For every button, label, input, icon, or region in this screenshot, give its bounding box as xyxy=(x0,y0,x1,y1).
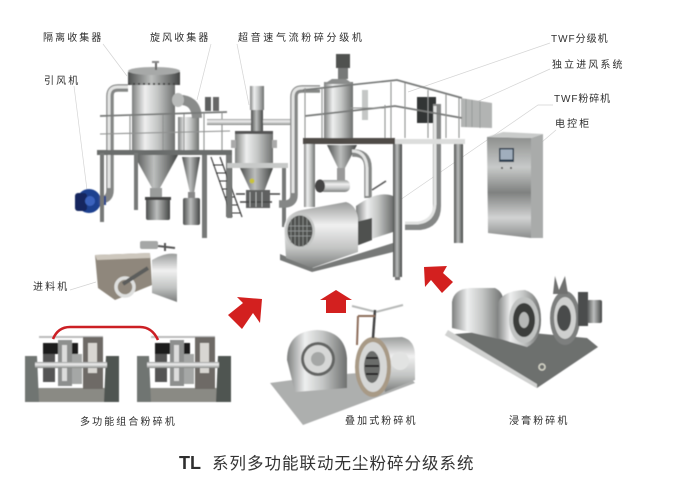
inlet pipe to blower xyxy=(100,87,128,200)
arrow: center red xyxy=(320,290,352,313)
label: TWF分级机: TWF分级机 xyxy=(551,32,609,45)
rear shaft xyxy=(578,292,602,326)
machine group: TWF classifier frame xyxy=(279,54,492,280)
rear housing xyxy=(39,336,103,389)
cone and lower section xyxy=(236,168,280,208)
label: 电控柜: 电控柜 xyxy=(555,117,591,130)
ladder xyxy=(211,157,242,217)
railing xyxy=(100,112,230,150)
cyclone collector xyxy=(172,93,219,225)
label: 超音速气流粉碎分级机: 超音速气流粉碎分级机 xyxy=(238,31,364,44)
label: 叠加式粉碎机: 叠加式粉碎机 xyxy=(345,414,418,427)
leader lines xyxy=(70,43,556,290)
red connecting arc xyxy=(53,327,158,340)
main wheel housing xyxy=(287,330,347,392)
open door disc xyxy=(355,337,391,397)
label: 浸膏粉碎机: 浸膏粉碎机 xyxy=(509,414,570,427)
base plate xyxy=(148,388,220,402)
cabinet front xyxy=(487,137,531,238)
bag collector tank xyxy=(128,61,180,220)
lifting ring xyxy=(539,364,545,370)
top motor xyxy=(336,54,350,79)
motor housing xyxy=(452,288,503,340)
feeder machine photo xyxy=(95,241,177,302)
feeder body xyxy=(152,254,177,302)
multifunction mill photo right xyxy=(137,336,231,402)
elbow pipe beside cone xyxy=(352,151,368,198)
platform xyxy=(303,138,465,144)
side rail xyxy=(445,330,537,388)
base plate xyxy=(270,370,415,425)
label: TWF粉碎机: TWF粉碎机 xyxy=(554,92,611,105)
machine group: supersonic jet mill classifier xyxy=(207,86,291,227)
TWF mill motor with grill xyxy=(284,202,358,268)
label: 多功能组合粉碎机: 多功能组合粉碎机 xyxy=(80,415,177,428)
table legs xyxy=(227,168,286,227)
horizontal feed pipe xyxy=(207,119,291,125)
base plate xyxy=(445,330,598,388)
neck xyxy=(251,110,263,133)
platform and legs xyxy=(97,150,232,238)
touchscreen xyxy=(499,148,514,169)
label: 进料机: 进料机 xyxy=(33,280,69,293)
feeder hopper xyxy=(95,253,152,300)
icon: blue induced draft fan xyxy=(75,189,106,213)
shaft xyxy=(35,362,107,368)
first grinding disc xyxy=(497,290,541,347)
label: 引风机: 引风机 xyxy=(44,74,80,87)
label: 独立进风系统: 独立进风系统 xyxy=(552,58,625,71)
connecting pipe xyxy=(279,88,320,204)
TWF classifier tank xyxy=(324,79,368,168)
shaft xyxy=(147,362,219,368)
railing xyxy=(303,80,462,138)
multifunction mill photo left xyxy=(25,336,119,402)
arrow: right red xyxy=(424,266,453,293)
feeder screw head xyxy=(140,241,175,251)
TWF mill drum xyxy=(356,181,393,244)
title xyxy=(179,453,474,473)
arrow: left red xyxy=(228,297,262,329)
title: Chinese text: 系列多功能联动无尘粉碎分级系统 xyxy=(212,454,474,473)
T handle xyxy=(352,305,403,345)
second grinding disc xyxy=(550,291,580,345)
cabinet side xyxy=(531,134,543,238)
air inlet box and return pipe xyxy=(405,97,437,226)
electric control cabinet xyxy=(487,132,543,238)
coupling xyxy=(356,218,372,246)
frame legs xyxy=(304,144,463,280)
label: 隔离收集器: 隔离收集器 xyxy=(43,31,104,44)
motor housing xyxy=(377,337,415,392)
screw feeder xyxy=(315,168,350,192)
rear housing xyxy=(151,336,215,389)
guard panels xyxy=(137,356,231,402)
independent air inlet duct xyxy=(461,98,492,128)
base plate xyxy=(36,388,108,402)
guard panels xyxy=(25,356,119,402)
label: 旋风收集器: 旋风收集器 xyxy=(150,31,210,44)
upper cylinder xyxy=(250,86,264,110)
stacked mill photo xyxy=(270,305,415,425)
cabinet top xyxy=(487,132,543,138)
support table xyxy=(227,163,288,168)
title: TL: TL xyxy=(179,453,201,473)
machine group: left collector unit xyxy=(75,61,242,238)
classifier body xyxy=(231,131,277,163)
paste mill photo xyxy=(445,276,602,388)
machine base xyxy=(280,243,393,272)
hopper ring xyxy=(95,253,150,296)
spike handles xyxy=(553,276,568,294)
